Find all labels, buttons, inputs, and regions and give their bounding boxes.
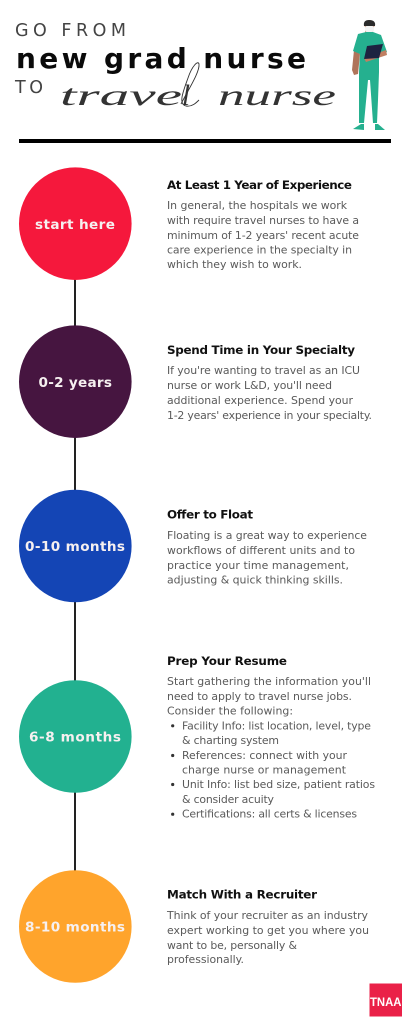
title: l <box>182 79 190 112</box>
panel: prep your resume: Facility Info: list location, level, type <box>182 719 371 732</box>
panel: match with a recruiter: professionally. <box>167 953 244 966</box>
logo: TNAA: TNAA <box>370 997 402 1009</box>
step marker: 6-8 months <box>19 680 132 793</box>
panel: at least 1 year of experience: At Least 1 Year of Experience <box>167 178 352 192</box>
panel: offer to float: adjusting & quick thinking skills. <box>167 574 343 586</box>
panel: spend time in your specialty: nurse or work L&D, you'll need <box>167 379 332 392</box>
panel: match with a recruiter: Match With a Recruiter <box>167 887 317 901</box>
header rule <box>19 139 391 143</box>
panel: at least 1 year of experience: In general, the hospitals we work <box>167 199 348 212</box>
panel: prep your resume: charge nurse or management <box>182 764 347 776</box>
panel: at least 1 year of experience: minimum of 1-2 years' recent acute <box>167 229 359 242</box>
title: TO <box>14 78 43 98</box>
panel: at least 1 year of experience: which they wish to work. <box>167 258 302 271</box>
step marker: 6-8 months: 6-8 months <box>29 730 121 746</box>
title: nurse <box>218 79 336 112</box>
panel: at least 1 year of experience: care experience in the specialty in <box>167 244 352 256</box>
panel: offer to float: Offer to Float <box>167 507 253 521</box>
icon: nurse illustration <box>352 20 387 130</box>
title: new grad nurse <box>16 42 306 75</box>
step marker: 8-10 months: 8-10 months <box>25 920 125 936</box>
panel: match with a recruiter <box>166 887 369 966</box>
panel: match with a recruiter: want to be, personally & <box>167 939 298 952</box>
panel: at least 1 year of experience: with require travel nurses to have a <box>167 214 359 227</box>
step marker: 8-10 months <box>19 870 132 983</box>
title: trave <box>60 79 182 112</box>
timeline connector <box>74 278 76 872</box>
panel: offer to float: Floating is a great way to experience <box>167 529 367 542</box>
step marker: start here <box>19 167 132 280</box>
panel: spend time in your specialty: If you're wanting to travel as an ICU <box>167 364 360 377</box>
panel: prep your resume: Consider the following: <box>167 704 293 718</box>
panel: offer to float: practice your time management, <box>167 559 349 572</box>
panel: prep your resume: & consider acuity <box>182 793 275 806</box>
panel: prep your resume: Unit Info: list bed size, patient ratios <box>182 778 375 791</box>
title <box>14 21 336 112</box>
step marker: 0-10 months: 0-10 months <box>25 539 125 555</box>
panel: at least 1 year of experience <box>167 178 359 271</box>
panel: prep your resume: Start gathering the information you'll <box>167 675 371 688</box>
step marker: start here: start here <box>35 217 115 233</box>
panel: spend time in your specialty: additional experience. Spend your <box>167 394 354 407</box>
title: GO FROM <box>15 21 126 41</box>
panel: prep your resume: References: connect with your <box>182 749 348 762</box>
panel: prep your resume: Prep Your Resume <box>167 654 287 668</box>
step marker: 0-10 months <box>19 490 132 602</box>
panel: spend time in your specialty: Spend Time in Your Specialty <box>167 343 355 357</box>
panel: offer to float <box>167 507 367 586</box>
step marker: 0-2 years <box>19 325 132 438</box>
panel: offer to float: workflows of different units and to <box>167 544 355 557</box>
logo: TNAA <box>370 984 402 1016</box>
panel: prep your resume <box>167 654 375 821</box>
panel: prep your resume: need to apply to travel nurse jobs. <box>167 690 352 703</box>
panel: match with a recruiter: expert working to get you where you <box>167 924 369 937</box>
step marker: 0-2 years: 0-2 years <box>38 375 112 391</box>
panel: spend time in your specialty: 1-2 years' experience in your specialty. <box>167 409 372 422</box>
panel: prep your resume: & charting system <box>182 734 279 747</box>
panel: match with a recruiter: Think of your recruiter as an industry <box>166 909 369 922</box>
panel: prep your resume: Certifications: all certs & licenses <box>182 808 357 821</box>
panel: spend time in your specialty <box>167 343 372 422</box>
